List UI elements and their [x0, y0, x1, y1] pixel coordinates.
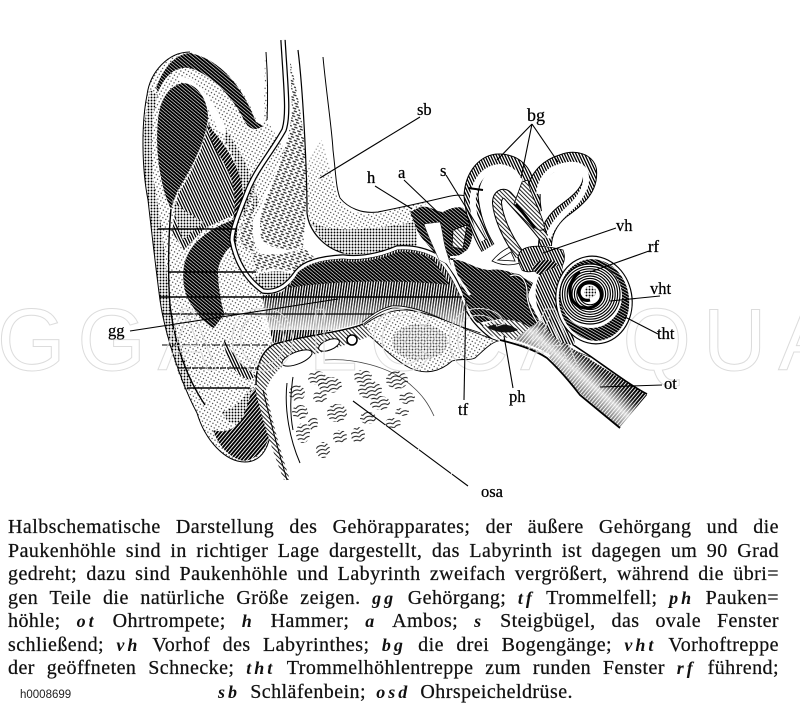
helix top shading	[156, 53, 263, 129]
vestibule (vh)	[518, 246, 564, 276]
text: schließend; vh Vorhof des Labyrinthes; bg die drei Bogengänge; vht Vorhoftreppe	[8, 634, 779, 656]
label ph: ph	[509, 387, 526, 406]
label gg: gg	[108, 321, 124, 340]
text: gedreht; dazu sind Paukenhöhle und Labyrinth zweifach vergrößert, während die übri=	[8, 563, 779, 585]
eustachian tube (ot)	[500, 320, 647, 428]
outer ear (auricle)	[143, 52, 300, 462]
concha dark	[183, 218, 238, 328]
horizontal reference lines	[158, 229, 462, 388]
middle ear cavity (ph)	[410, 207, 590, 358]
antihelix body	[172, 122, 239, 250]
outer rim dense stipple	[144, 90, 193, 390]
label vh: vh	[616, 216, 633, 235]
label tf: tf	[458, 400, 469, 419]
semicircular canals (bg)	[468, 159, 590, 255]
skull surface line	[323, 57, 466, 212]
text: gen Teile die natürliche Größe zeigen. gg Gehörgang; tf Trommelfell; ph Pauken=	[8, 587, 779, 609]
text: Paukenhöhle sind in richtiger Lage dargestellt, das Labyrinth ist dagegen um 90 Grad	[8, 540, 779, 562]
label tht: tht	[657, 324, 675, 343]
external auditory canal (gg)	[262, 250, 480, 343]
anatomical illustration of the ear	[0, 40, 800, 501]
cochlea	[536, 250, 639, 350]
part labels	[108, 100, 677, 501]
label rf: rf	[648, 237, 659, 256]
parotid gland (osd)	[263, 360, 434, 480]
text: Halbschematische Darstellung des Gehörapparates; der äußere Gehörgang und die	[8, 516, 779, 538]
label bg: bg	[527, 105, 545, 125]
stippled bone behind canal	[306, 140, 432, 254]
label vht: vht	[650, 279, 672, 298]
mastoid spongy bone	[260, 60, 306, 250]
lower canal wall line	[363, 307, 480, 334]
caption text block	[8, 516, 779, 703]
text: höhle; ot Ohrtrompete; h Hammer; a Ambos; s Steigbügel, das ovale Fenster	[8, 610, 779, 632]
lower bony wall with air cells	[256, 310, 498, 480]
leader lines	[130, 117, 662, 486]
label sb: sb	[417, 100, 432, 119]
label h: h	[367, 168, 376, 187]
helix inner rim line	[169, 209, 205, 405]
image code: h0008699	[20, 689, 71, 701]
inner loop	[497, 194, 544, 255]
text: sb Schläfenbein; osd Ohrspeicheldrüse.	[218, 681, 573, 703]
ossicles: hammer, anvil, stirrup	[424, 222, 520, 295]
lobe dark crescent	[213, 385, 269, 461]
tragus	[214, 317, 275, 380]
label osa: osa	[481, 482, 504, 501]
label a: a	[398, 163, 406, 182]
temporal bone (sb) region	[232, 40, 497, 340]
label s: s	[440, 161, 446, 180]
concha light inner shading	[218, 246, 300, 316]
scapha dark teardrop	[157, 83, 208, 209]
white cortical band	[232, 40, 497, 340]
text: der geöffneten Schnecke; tht Trommelhöhlentreppe zum runden Fenster rf führend;	[8, 657, 779, 679]
grey patch	[482, 320, 531, 340]
label ot: ot	[664, 374, 677, 393]
